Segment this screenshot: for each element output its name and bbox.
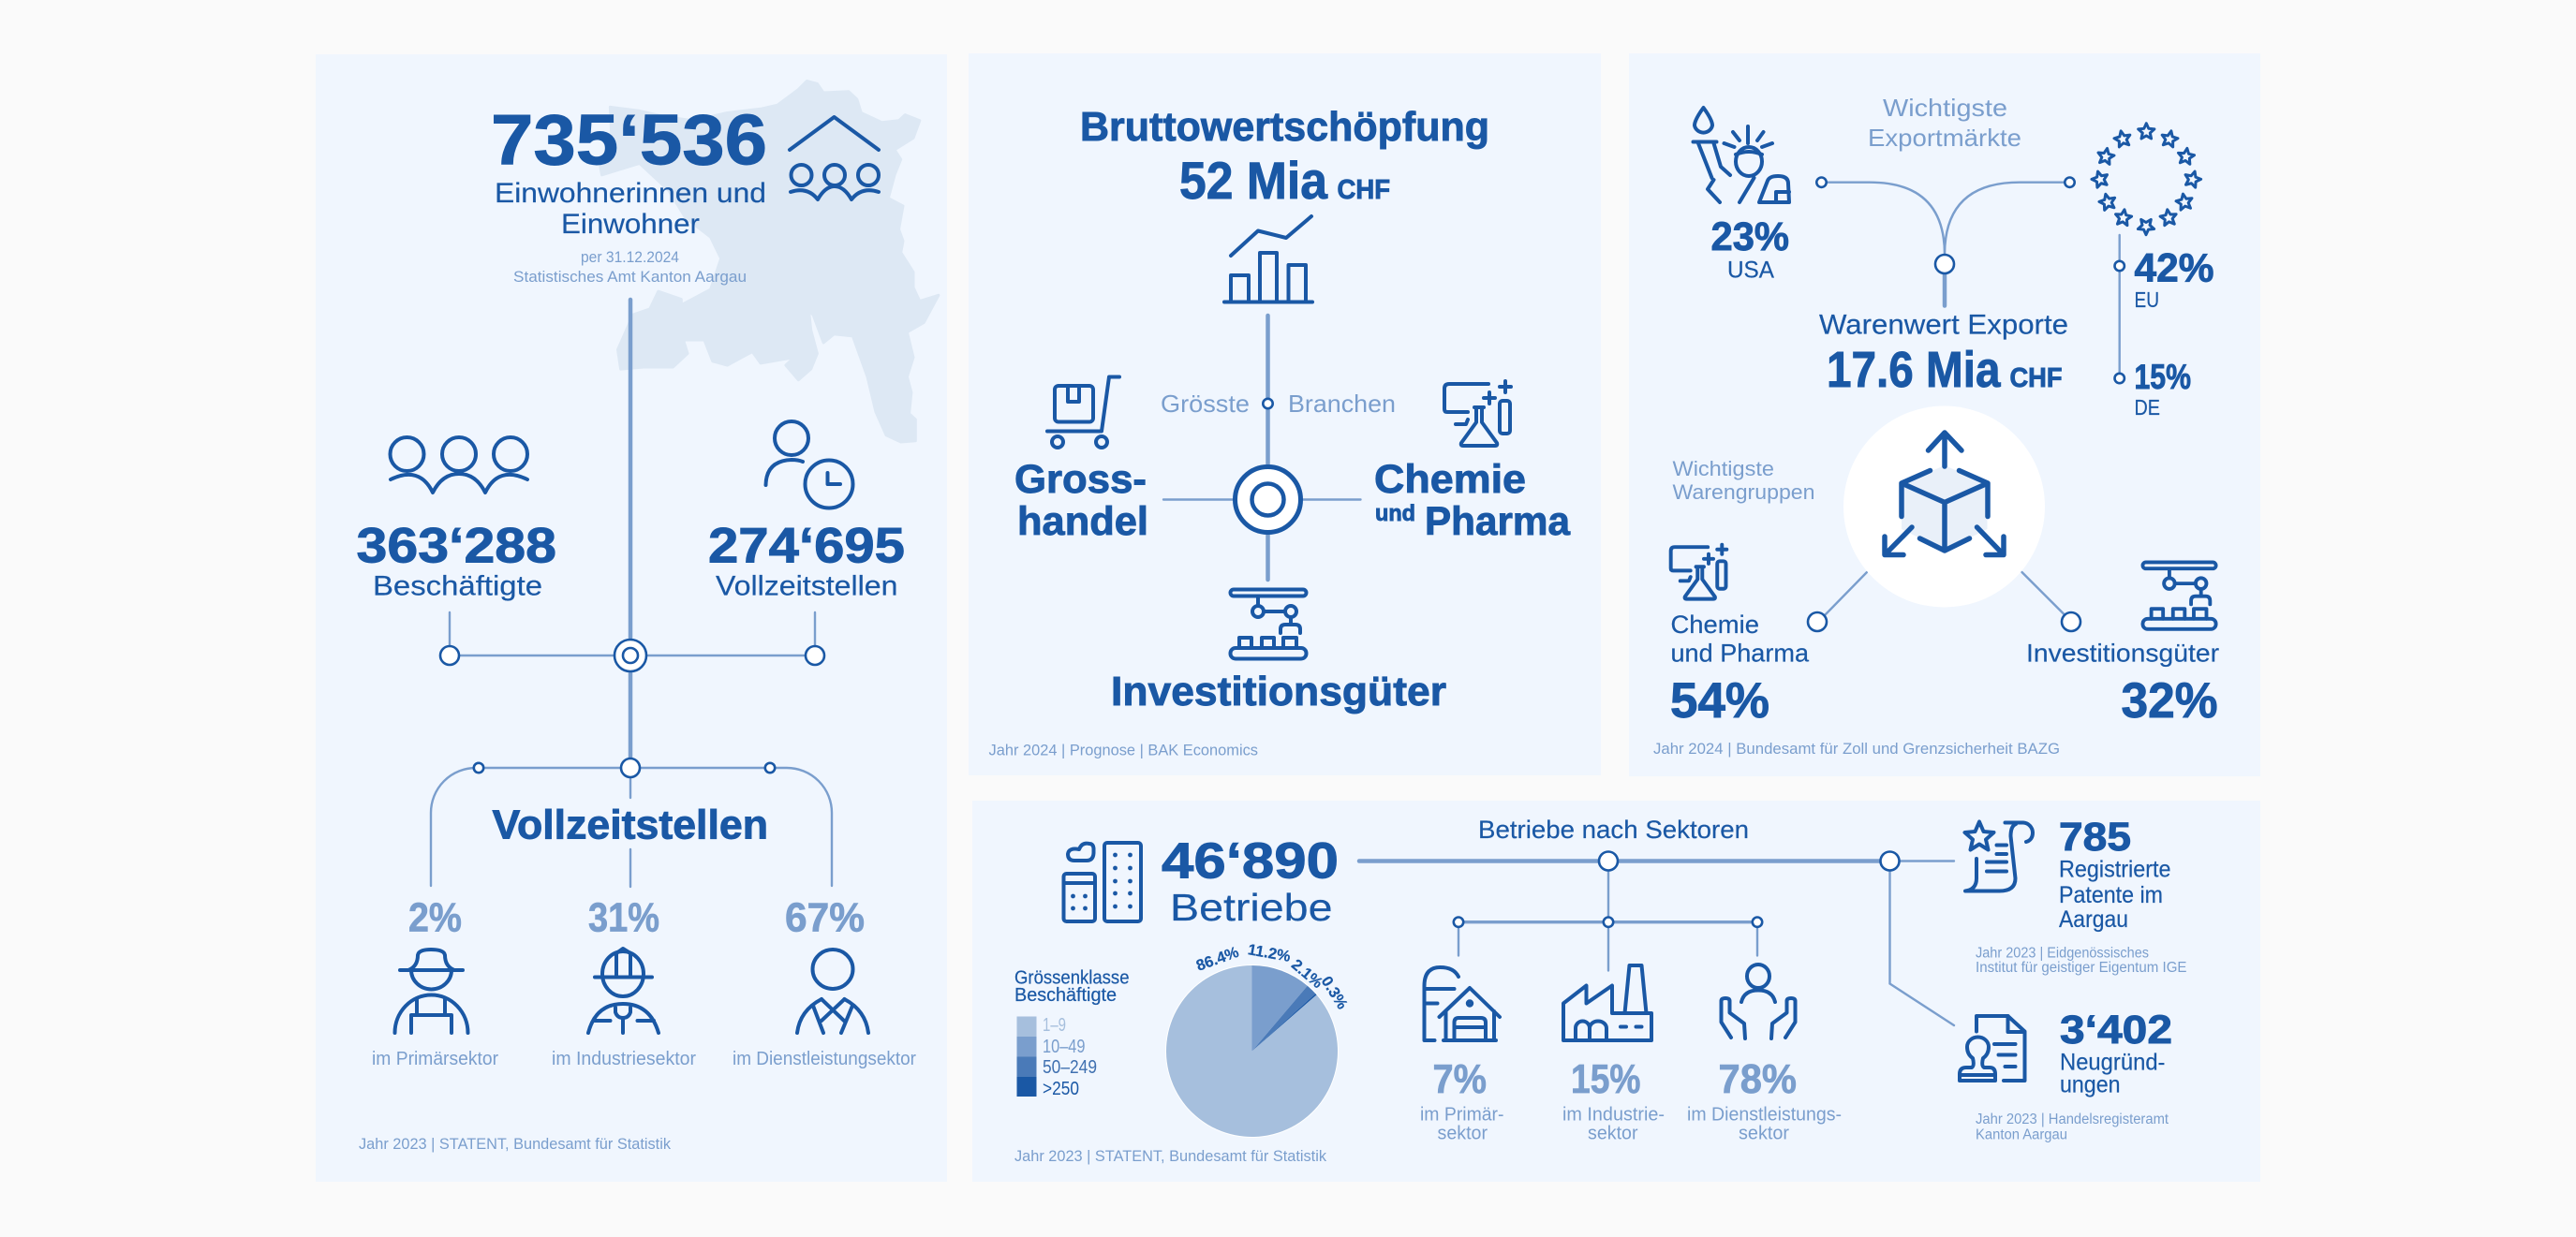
stat: Beschäftigte: 363‘288: [356, 519, 556, 573]
panel: Bruttowertschöpfung: [969, 53, 1601, 775]
stat: Primärsektor 2%: 2%: [408, 895, 462, 940]
icon: three people: [390, 437, 527, 493]
source note: Jahr 2023 | STATENT, Bundesamt für Statistik: [359, 1135, 671, 1153]
heading: Warenwert Exporte: 17.6 Mia: [1827, 342, 2001, 398]
connector tree: [431, 300, 832, 887]
icon: office buildings: [1064, 843, 1141, 921]
legend: Grössenklasse Beschäftigte: >250: [1043, 1079, 1079, 1099]
icon: house with people: [790, 117, 879, 199]
stat: 3'402 Neugründungen: ungen: [2060, 1071, 2121, 1097]
label: Grosshandel: handel: [1017, 499, 1148, 544]
label: Chemie und Pharma: und: [1375, 501, 1415, 526]
population headline: per 31.12.2024: [581, 248, 679, 266]
stat: 3'402 Neugründungen: [2060, 1008, 2172, 1097]
stat: Primärsektor 7%: sektor: [1437, 1124, 1488, 1144]
population headline: Einwohnerinnen und: [495, 178, 766, 209]
stat: Dienstleistungssektor 78%: [1687, 965, 1842, 1144]
label: Chemie und Pharma: Pharma: [1425, 499, 1571, 544]
icon: farm: [1424, 967, 1500, 1040]
panel: Exporte: [1629, 53, 2260, 776]
icon: chemistry and pharma: [1444, 381, 1511, 446]
stat: EU: 42%: [2134, 245, 2214, 290]
stat: Primärsektor 7%: im Primär-: [1420, 1105, 1504, 1126]
source note: Jahr 2023 | STATENT, Bundesamt für Statistik: [1014, 1147, 1326, 1165]
legend: Grössenklasse Beschäftigte: [1014, 968, 1130, 1099]
stat: Primärsektor 2%: im Primärsektor: [372, 1049, 498, 1069]
source note: patents: [1976, 946, 2186, 976]
stat: Industriesektor 31%: im Industriesektor: [552, 1049, 696, 1069]
population headline: [491, 101, 767, 286]
source note: Handelsregisteramt: [1976, 1112, 2169, 1142]
stat: Beschäftigte: Beschäftigte: [373, 571, 542, 601]
stat: Primärsektor 2%: [372, 895, 498, 1069]
heading: Betriebe nach Sektoren: Betriebe nach Sektoren: [1478, 816, 1749, 844]
stat: 3'402 Neugründungen: Neugründ-: [2060, 1049, 2166, 1075]
stat: DE: DE: [2134, 395, 2160, 420]
icon: bar chart with trend line: [1224, 216, 1312, 302]
population headline: Statistisches Amt Kanton Aargau: [513, 268, 747, 286]
stat: USA: [1710, 214, 1789, 283]
stat: 785 Patente: Patente im: [2059, 882, 2163, 908]
heading: Vollzeitstellen: Vollzeitstellen: [493, 802, 768, 848]
stat: Beschäftigte: [356, 519, 556, 601]
label: Chemie und Pharma: Chemie: [1374, 457, 1526, 502]
pie chart: 86.4%: [1194, 944, 1241, 975]
population headline: 735‘536: [491, 101, 767, 180]
stat: 785 Patente: Registrierte: [2059, 856, 2171, 882]
stat: Vollzeitstellen: 274‘695: [708, 519, 905, 573]
population headline: Einwohner: [561, 209, 700, 240]
stat: Primärsektor 7%: [1420, 967, 1504, 1144]
stat: Vollzeitstellen: [708, 519, 905, 601]
stat: Industriesektor 15%: im Industrie-: [1562, 1105, 1665, 1126]
stat: Dienstleistungssektor 67%: 67%: [785, 895, 865, 940]
legend: Grössenklasse Beschäftigte: 1–9: [1043, 1015, 1066, 1036]
stat: DE: [2134, 358, 2191, 420]
pie chart: 0.3%: [1318, 974, 1351, 1012]
source note: Handelsregisteramt: Kanton Aargau: [1976, 1127, 2067, 1142]
stat: Industriesektor 15%: 15%: [1571, 1056, 1641, 1102]
legend: Grössenklasse Beschäftigte: 50–249: [1043, 1057, 1097, 1078]
stat: USA: USA: [1727, 257, 1774, 283]
legend: Grössenklasse Beschäftigte: Beschäftigte: [1014, 985, 1117, 1006]
stat: Primärsektor 7%: 7%: [1433, 1056, 1487, 1102]
icon: assembly robot small: [2142, 562, 2216, 629]
stat: Industriesektor 31%: [552, 895, 696, 1069]
connector cross: [1163, 316, 1360, 580]
heading: Bruttowertschöpfung 52 Mia CHF: 52 Mia: [1179, 151, 1328, 210]
stat: Dienstleistungssektor 67%: im Dienstleistungsektor: [733, 1049, 916, 1069]
stat: Dienstleistungssektor 78%: im Dienstleistungs-: [1687, 1105, 1842, 1126]
icon: document with stamp: [1960, 1016, 2025, 1081]
label: Wichtigste Warengruppen: Wichtigste: [1673, 457, 1774, 480]
stat: 46'890 Betriebe: Betriebe: [1170, 886, 1332, 929]
stat: 785 Patente: 785: [2059, 815, 2131, 860]
icon: box with arrows in white circle: [1843, 406, 2045, 607]
pie chart: [1165, 941, 1351, 1138]
stat: Chemie und Pharma: Chemie: [1671, 611, 1759, 639]
label: Chemie und Pharma: [1374, 457, 1571, 544]
stat: Investitionsgüter: Investitionsgüter: [2026, 639, 2219, 667]
icon: factory: [1563, 965, 1651, 1040]
label: Wichtigste Exportmärkte: Wichtigste: [1883, 94, 2007, 122]
source note: Jahr 2024 | Bundesamt für Zoll und Grenzsicherheit BAZG: [1653, 740, 2060, 758]
heading: Warenwert Exporte: [1819, 309, 2068, 398]
stat: Chemie und Pharma: und Pharma: [1671, 639, 1810, 667]
stat: 3'402 Neugründungen: 3‘402: [2060, 1008, 2172, 1053]
icon: patent scroll: [1965, 822, 2033, 891]
source note: Jahr 2024 | Prognose | BAK Economics: [989, 742, 1258, 758]
stat: Dienstleistungssektor 78%: 78%: [1718, 1056, 1797, 1102]
label: Grösste Branchen: [1161, 390, 1396, 418]
pie chart: 11.2%: [1247, 941, 1292, 965]
stat: Investitionsgüter: [2026, 639, 2219, 729]
stat: Dienstleistungssektor 78%: sektor: [1739, 1124, 1789, 1144]
icon: assembly robot: [1231, 590, 1306, 659]
source note: patents: Jahr 2023 | Eidgenössisches: [1976, 946, 2149, 961]
icon: person with clock: [766, 421, 852, 508]
stat: Investitionsgüter: 32%: [2121, 673, 2218, 729]
stat: DE: 15%: [2134, 358, 2191, 396]
stat: Industriesektor 31%: 31%: [588, 895, 659, 940]
heading: Warenwert Exporte: Warenwert Exporte: [1819, 309, 2068, 341]
panel: Bevölkerung und Beschäftigung: [316, 54, 947, 1182]
heading: Bruttowertschöpfung 52 Mia CHF: [1080, 104, 1489, 210]
stat: 785 Patente: Aargau: [2059, 906, 2128, 933]
connector: export markets: [1816, 178, 2075, 305]
connector: sectors and patents: [1359, 852, 1954, 1025]
heading: Bruttowertschöpfung 52 Mia CHF: Bruttowertschöpfung: [1080, 104, 1489, 150]
label: Investitionsgüter: Investitionsgüter: [1111, 669, 1446, 714]
label: Wichtigste Exportmärkte: [1868, 94, 2021, 152]
icon: construction worker: [588, 949, 659, 1033]
stat: 785 Patente: [2059, 815, 2171, 933]
legend: Grössenklasse Beschäftigte: Grössenklasse: [1014, 968, 1130, 989]
stat: EU: [2134, 245, 2214, 312]
heading: Bruttowertschöpfung 52 Mia CHF: CHF: [1338, 175, 1390, 205]
pie chart: 2.1%: [1288, 956, 1326, 992]
icon: statue of liberty: [1694, 108, 1789, 202]
label: Grösste Branchen: Branchen: [1288, 390, 1396, 418]
heading: Warenwert Exporte: CHF: [2010, 363, 2063, 393]
stat: EU: EU: [2134, 287, 2159, 312]
stat: Industriesektor 15%: [1562, 965, 1665, 1144]
stat: Chemie und Pharma: 54%: [1670, 673, 1769, 729]
stat: 46'890 Betriebe: [1162, 833, 1339, 929]
icon: office worker: [797, 950, 868, 1033]
label: Grosshandel: Gross-: [1014, 457, 1147, 502]
stat: 46'890 Betriebe: 46‘890: [1162, 833, 1339, 890]
icon: farmer: [395, 950, 468, 1033]
stat: Dienstleistungssektor 67%: [733, 895, 916, 1069]
stat: Industriesektor 15%: sektor: [1588, 1124, 1638, 1144]
source note: patents: Institut für geistiger Eigentum IGE: [1976, 960, 2186, 976]
stat: Vollzeitstellen: Vollzeitstellen: [716, 571, 897, 601]
icon: person in hands: [1722, 965, 1795, 1038]
icon: chemistry and pharma small: [1671, 545, 1726, 599]
source note: Handelsregisteramt: Jahr 2023 | Handelsregisteramt: [1976, 1112, 2169, 1127]
panel: Betriebe: [972, 801, 2260, 1182]
label: Wichtigste Exportmärkte: Exportmärkte: [1868, 124, 2021, 152]
icon: shopping cart: [1047, 376, 1119, 448]
label: Wichtigste Warengruppen: Warengruppen: [1673, 480, 1815, 504]
label: Grösste Branchen: Grösste: [1161, 390, 1250, 418]
legend: Grössenklasse Beschäftigte: 10–49: [1043, 1037, 1085, 1057]
connector: EU and DE: [2115, 235, 2124, 383]
label: Grosshandel: [1014, 457, 1148, 544]
label: Wichtigste Warengruppen: [1673, 457, 1815, 504]
stat: Chemie und Pharma: [1670, 611, 1810, 729]
connector: product groups: [1808, 572, 2080, 631]
stat: USA: 23%: [1710, 214, 1789, 259]
map of Kanton Aargau: [600, 81, 939, 442]
icon: EU stars: [2090, 124, 2202, 235]
